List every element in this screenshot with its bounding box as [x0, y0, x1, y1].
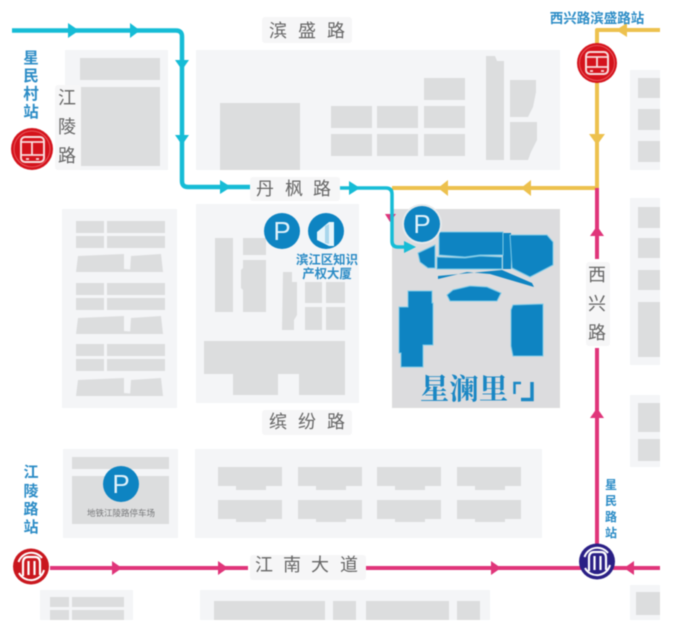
station: 江陵路站 [13, 548, 49, 584]
building: main complex [418, 232, 553, 287]
parking icon: 丹枫路: P [273, 216, 291, 246]
label: 江陵路站: 陵 [23, 483, 39, 500]
label: 星民路站: 路 [605, 509, 617, 524]
parking icon: 江陵路: P [112, 469, 130, 499]
label: 星民路站: 站 [605, 525, 617, 540]
label: 江陵路站: 站 [23, 519, 39, 536]
block: 星澜里 site [392, 209, 560, 408]
road: 西兴路: 西 [588, 265, 606, 285]
metro line: cyan [12, 23, 416, 253]
logo: 星澜里: 星澜里 [420, 373, 508, 406]
building: east tower [511, 304, 543, 356]
road: 滨盛路: 滨盛路 [269, 21, 345, 41]
label: 西兴路滨盛路站: 西兴路滨盛路站 [550, 10, 645, 26]
label: 滨江区知识产权大厦 [296, 252, 358, 281]
parking icon: 星澜里 [402, 204, 442, 244]
block: north [196, 50, 560, 170]
label: 星民村站: 站 [23, 103, 39, 121]
block: south-west parking [63, 449, 178, 538]
road: 江陵路: 路 [58, 146, 76, 166]
icon: knowledge property building [308, 213, 344, 249]
block: south [195, 449, 542, 538]
blocks: right edge [630, 70, 660, 620]
block: west [62, 209, 177, 408]
station: 星民村站 [11, 128, 53, 170]
label: 星民村站: 民 [23, 68, 39, 85]
label: 滨江区知识产权大厦: 产权大厦 [302, 266, 352, 281]
parking icon: 丹枫路 [264, 213, 300, 249]
metro line: yellow [392, 23, 660, 196]
building: central oval [447, 286, 501, 301]
block: knowledge property building [196, 204, 359, 403]
station: 西兴路滨盛路站 [577, 43, 617, 83]
road: 西兴路: 路 [588, 323, 606, 343]
label: 星民村站: 星 [23, 49, 39, 67]
label: 星民路站: 星 [605, 478, 617, 492]
label: 滨江区知识产权大厦: 滨江区知识 [296, 252, 358, 267]
road: 西兴路: 兴 [588, 294, 606, 314]
block: bottom middle [200, 590, 490, 620]
parking icon: 江陵路 [103, 466, 139, 502]
label: 星民路站: 民 [605, 494, 617, 508]
label: parking lot: 地铁江陵路停车场 [87, 508, 155, 518]
label: 江陵路站: 江 [23, 464, 39, 481]
label: 江陵路站: 路 [23, 500, 39, 518]
road: 缤纷路: 缤纷路 [269, 412, 345, 432]
metro line: magenta [50, 188, 660, 575]
building: west tower [399, 291, 433, 367]
road: 江南大道: 江南大道 [255, 555, 358, 575]
road labels [55, 17, 610, 580]
block: northwest [65, 50, 168, 170]
parking icon: 星澜里: P [413, 209, 431, 239]
road: 江陵路: 陵 [58, 117, 76, 137]
road: 江陵路: 江 [58, 88, 76, 108]
block: bottom left [40, 590, 133, 620]
road: 丹枫路: 丹枫路 [256, 179, 331, 199]
station: 星民路站 [579, 544, 615, 580]
label: 星民村站: 村 [23, 84, 39, 103]
